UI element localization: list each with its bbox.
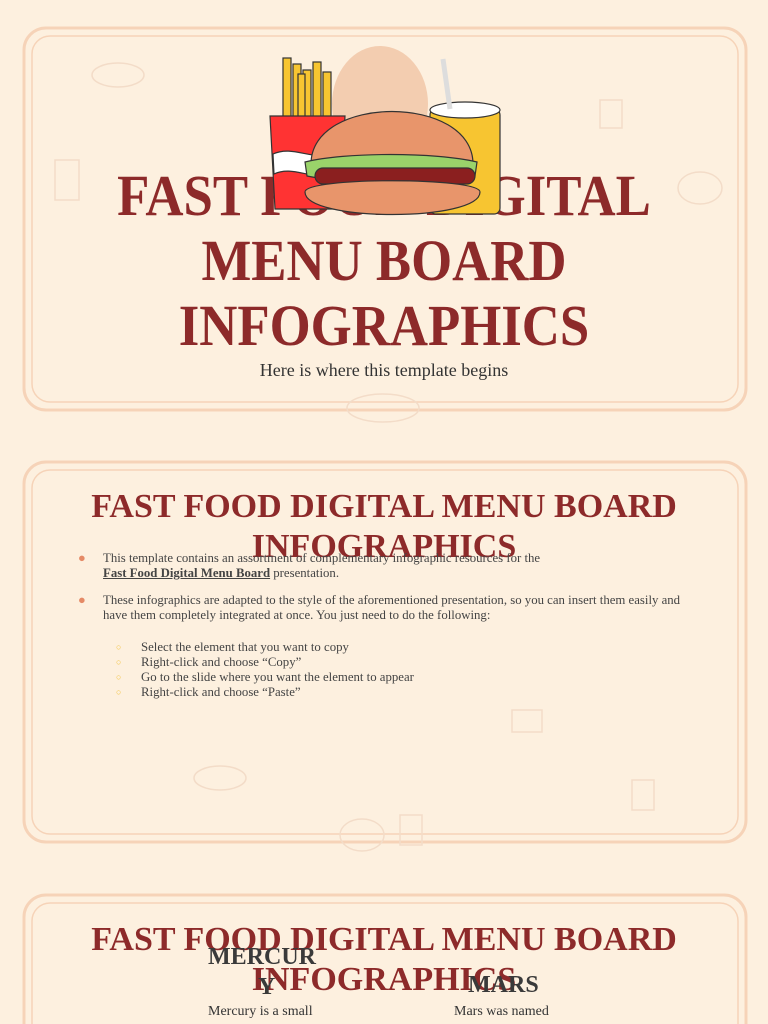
text block: bullets: These infographics are adapted to the style of the aforementioned presentation, so you can insert them easily and have them completely integrated at once. You just need to do the following: [103,593,680,622]
text block: bullets: This template contains an assortment of complementary infographic resources for the [103,551,540,565]
title 3: INFOGRAPHICS [252,961,516,998]
title 1: INFOGRAPHICS [179,293,589,358]
text block: bullets [78,551,680,699]
heading: mars: MARS [468,972,539,998]
title 3: FAST FOOD DIGITAL MENU BOARD [91,921,677,958]
title 1 [117,163,651,358]
text block: bullets: ○ [116,657,121,667]
subtitle: Here is where this template begins [260,360,508,380]
text block: bullets: Select the element that you want to copy [141,640,349,654]
title 1: FAST FOOD DIGITAL [117,163,651,228]
title 3 [91,921,677,998]
heading: mercury [208,944,316,1000]
heading: mercury: MERCUR [208,944,316,970]
text block: bullets: ● [78,593,86,607]
text block: bullets: ● [78,551,86,565]
text block: bullets: ○ [116,687,121,697]
title 2 [91,488,677,565]
text: mars: Mars was named [454,1004,549,1019]
text block: bullets: Right-click and choose “Paste” [141,685,301,699]
text block: bullets: Go to the slide where you want the element to appear [141,670,414,684]
text block: bullets: ○ [116,672,121,682]
illustration: fast food [269,46,501,216]
title 2: FAST FOOD DIGITAL MENU BOARD [91,488,677,525]
text block: bullets: ○ [116,642,121,652]
title 2: INFOGRAPHICS [252,528,516,565]
title 1: MENU BOARD [201,228,567,293]
text block: bullets: Right-click and choose “Copy” [141,655,301,669]
text block: bullets: Fast Food Digital Menu Board presentation. [103,566,339,580]
text: mercury: Mercury is a small [208,1004,313,1019]
heading: mercury: Y [258,974,275,1000]
